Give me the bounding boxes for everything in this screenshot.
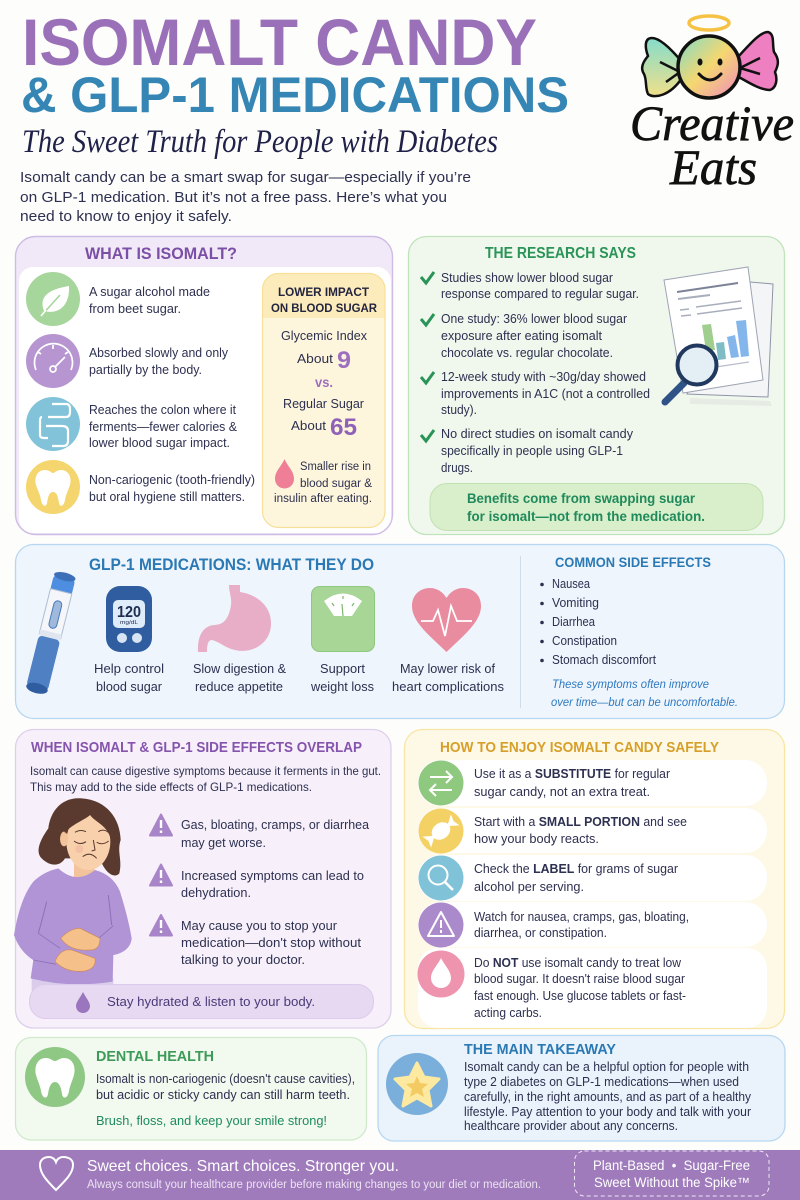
heading: WHAT IS ISOMALT? (85, 244, 237, 263)
note: symptoms improve: These symptoms often improve (552, 677, 709, 691)
box heading: LOWER IMPACT (278, 285, 370, 299)
icon: injection pen (25, 570, 76, 696)
logo wordmark (630, 95, 794, 195)
note: smaller rise: blood sugar & (300, 478, 372, 490)
callout: benefits: for isomalt—not from the medication. (467, 508, 705, 524)
regular sugar value: Regular Sugar (283, 397, 364, 411)
intro text (20, 169, 471, 225)
callout: benefits: Benefits come from swapping sugar (467, 490, 696, 506)
text: non-cariogenic: but oral hygiene still matters. (89, 490, 245, 504)
warning item: gas and bloating: Gas, bloating, cramps, or diarrhea (181, 818, 369, 832)
text: reaches the colon (89, 403, 238, 450)
intro text: Isomalt candy can be a smart swap for sugar—especially if you’re (20, 169, 471, 186)
panel: glp-1 medications (16, 544, 784, 718)
warning item: stopping medication: medication—don't stop without (181, 936, 362, 950)
tip: Brush, floss, and keep your smile strong! (96, 1113, 327, 1128)
subtitle: The Sweet Truth for People with Diabetes (22, 124, 498, 160)
research checklist: 12-week study with ~30g/day showed (441, 370, 646, 384)
icon: heart outline (40, 1157, 73, 1190)
heading: WHEN ISOMALT & GLP-1 SIDE EFFECTS OVERLAP (31, 739, 362, 756)
title: ISOMALT CANDY (22, 5, 537, 79)
logo: Creative Eats (630, 16, 794, 195)
research checklist: chocolate vs. regular chocolate. (441, 346, 613, 360)
warning item: dehydration (150, 864, 364, 900)
body text: but acidic or sticky candy can still harm teeth. (96, 1087, 350, 1102)
tagline: Sweet choices. Smart choices. Stronger you. (87, 1158, 399, 1175)
label: help control blood sugar (94, 661, 164, 694)
side effects list: Constipation (552, 633, 617, 648)
glycemic index value: Glycemic Index (281, 329, 368, 343)
row: small portion: Start with a SMALL PORTION and see (474, 815, 687, 829)
icon: weighing scale (312, 586, 374, 652)
label: slow digestion (193, 661, 286, 694)
row: check the label (418, 855, 767, 901)
warning item: dehydration: Increased symptoms can lead to (181, 869, 364, 883)
icon: candy with halo (642, 16, 778, 98)
logo wordmark: Creative (630, 95, 794, 151)
warning item: stopping medication: May cause you to stop your (181, 919, 337, 933)
icon: tooth (25, 1047, 85, 1107)
note: smaller rise: Smaller rise in (300, 461, 371, 473)
research checklist: response compared to regular sugar. (441, 287, 639, 301)
text: non-cariogenic: Non-cariogenic (tooth-friendly) (89, 473, 255, 487)
side effects list (540, 576, 656, 667)
research checklist: exposure after eating isomalt (441, 329, 603, 343)
panel: how to enjoy safely (404, 730, 784, 1028)
icon: blood drop (275, 459, 294, 489)
heading: common side effects: COMMON SIDE EFFECTS (555, 554, 711, 570)
icon: stomach (198, 585, 271, 652)
warning item: gas and bloating: may get worse. (181, 836, 266, 850)
callout: stay hydrated: Stay hydrated & listen to your body. (107, 994, 315, 1009)
body text (464, 1059, 752, 1133)
row: do not treat low blood sugar: fast enough. Use glucose tablets or fast- (474, 989, 686, 1003)
label: slow digestion: reduce appetite (195, 679, 283, 694)
text: non-cariogenic (89, 473, 255, 504)
glycemic index value: 9 (337, 347, 351, 374)
label: support weight loss: weight loss (310, 679, 374, 694)
label: heart complications (392, 661, 504, 694)
note: symptoms improve (551, 677, 738, 709)
icon: tooth (26, 460, 80, 514)
panel: the research says (408, 236, 784, 534)
row: do not treat low blood sugar (418, 948, 767, 1028)
side effects list: Nausea (552, 576, 591, 591)
side effects list: Diarrhea (552, 614, 596, 629)
icon: glucose meter (106, 586, 152, 652)
intro text (30, 765, 381, 794)
label: help control blood sugar: blood sugar (96, 679, 163, 694)
glycemic index value: About (297, 351, 333, 366)
box heading (271, 285, 377, 315)
icon: gauge (26, 334, 80, 388)
text: reaches the colon: ferments—fewer calories & (89, 420, 238, 434)
icon: glucose meter: 120 (117, 604, 141, 621)
icon: leaf (26, 272, 80, 326)
box heading: ON BLOOD SUGAR (271, 301, 377, 315)
row: check the label: Check the LABEL for grams of sugar (474, 862, 678, 876)
label: heart complications: May lower risk of (400, 661, 495, 676)
callout: benefits (430, 484, 763, 530)
heading: THE MAIN TAKEAWAY (464, 1041, 616, 1058)
row: substitute: Use it as a SUBSTITUTE for regular (474, 767, 670, 781)
icon: star (386, 1053, 448, 1115)
text: sugar alcohol: from beet sugar. (89, 302, 181, 316)
illustration: woman holding stomach (14, 798, 132, 992)
row: small portion: how your body reacts. (474, 832, 599, 846)
research checklist (421, 271, 650, 475)
regular sugar value: About (291, 418, 326, 433)
row: substitute (418, 760, 767, 806)
regular sugar value: 65 (330, 414, 357, 441)
panel: what is isomalt (16, 236, 392, 534)
badge: plant-based sugar-free: Plant-Based • Sugar-Free (593, 1158, 750, 1173)
intro text: need to know to enjoy it safely. (20, 208, 232, 225)
research checklist: specifically in people using GLP-1 (441, 444, 623, 458)
row: substitute: sugar candy, not an extra treat. (474, 785, 650, 799)
callout: stay hydrated (30, 984, 374, 1018)
label: help control blood sugar: Help control (94, 661, 164, 676)
heading: HOW TO ENJOY ISOMALT CANDY SAFELY (440, 739, 719, 756)
icon: glucose meter: mg/dL (120, 620, 138, 626)
row: watch for symptoms (418, 902, 767, 948)
row: do not treat low blood sugar: acting carbs. (474, 1006, 542, 1020)
icons: check marks (421, 272, 434, 441)
disclaimer: Always consult your healthcare provider before making changes to your diet or medication. (87, 1179, 541, 1191)
row: do not treat low blood sugar: blood sugar. It doesn't raise blood sugar (474, 972, 685, 986)
intro text: on GLP-1 medication. But it’s not a free pass. Here’s what you (20, 189, 447, 206)
side effects list: Vomiting (552, 595, 599, 610)
heading: GLP-1 MEDICATIONS: WHAT THEY DO (89, 555, 374, 574)
label: slow digestion: Slow digestion & (193, 661, 286, 676)
warning item: gas and bloating (150, 814, 369, 850)
heading: DENTAL HEALTH (96, 1048, 214, 1065)
text: sugar alcohol: A sugar alcohol made (89, 285, 210, 299)
regular sugar value (283, 397, 364, 441)
body text: Isomalt is non-cariogenic (doesn't cause cavities), (96, 1071, 355, 1086)
research checklist: study). (441, 403, 477, 417)
body text: lifestyle. Pay attention to your body and talk with your (464, 1104, 752, 1119)
intro text: This may add to the side effects of GLP-1 medications. (30, 781, 312, 794)
row: watch for symptoms: Watch for nausea, cramps, gas, bloating, (474, 910, 689, 924)
row: small portion (418, 808, 767, 854)
heading: THE RESEARCH SAYS (485, 245, 636, 262)
warning item: stopping medication: talking to your doctor. (181, 953, 305, 967)
note: smaller rise: insulin after eating. (274, 493, 372, 505)
body text: carefully, in the right amounts, and as part of a healthy (464, 1089, 752, 1104)
glycemic index value (281, 329, 368, 374)
research checklist: One study: 36% lower blood sugar (441, 312, 627, 326)
research checklist: improvements in A1C (not a controlled (441, 387, 650, 401)
body text: healthcare provider about any concerns. (464, 1118, 678, 1133)
title (21, 5, 569, 123)
research checklist: Studies show lower blood sugar (441, 271, 613, 285)
panel: lower impact on blood sugar (262, 274, 385, 528)
intro text: Isomalt can cause digestive symptoms because it ferments in the gut. (30, 765, 381, 778)
research checklist: drugs. (441, 461, 473, 475)
text: absorbed slowly: partially by the body. (89, 363, 202, 377)
text: absorbed slowly: Absorbed slowly and only (89, 346, 229, 360)
text: absorbed slowly (89, 346, 229, 377)
label: support weight loss (310, 661, 374, 694)
footer banner (0, 1150, 800, 1200)
badge: plant-based sugar-free: Sweet Without the Spike™ (594, 1175, 750, 1190)
panel: side effects overlap (14, 730, 391, 1028)
icon: intestine (26, 397, 80, 451)
logo wordmark: Eats (669, 139, 757, 195)
row: check the label: alcohol per serving. (474, 880, 584, 894)
body text: Isomalt candy can be a helpful option for people with (464, 1059, 749, 1074)
icon: heart with pulse (412, 588, 481, 652)
warning item: stopping medication (150, 915, 362, 967)
label: heart complications: heart complications (392, 679, 504, 694)
panel: the main takeaway (378, 1036, 785, 1141)
body text (96, 1071, 355, 1102)
text: sugar alcohol (89, 285, 210, 316)
label: support weight loss: Support (320, 661, 365, 676)
research checklist: No direct studies on isomalt candy (441, 427, 634, 441)
note: symptoms improve: over time—but can be uncomfortable. (551, 695, 738, 709)
body text: type 2 diabetes on GLP-1 medications—when used (464, 1074, 739, 1089)
title: & GLP-1 MEDICATIONS (21, 67, 569, 123)
side effects list: Stomach discomfort (552, 652, 656, 667)
vs label: vs. (315, 374, 333, 390)
warning item: dehydration: dehydration. (181, 886, 251, 900)
text: reaches the colon: lower blood sugar impact. (89, 436, 230, 450)
panel: dental health (16, 1038, 366, 1140)
badge: plant-based sugar-free (574, 1151, 769, 1196)
note: smaller rise (274, 461, 372, 505)
icon: report with magnifying glass (664, 267, 773, 406)
row: do not treat low blood sugar: Do NOT use isomalt candy to treat low (474, 956, 682, 970)
text: reaches the colon: Reaches the colon where it (89, 403, 237, 417)
row: watch for symptoms: diarrhea, or constipation. (474, 926, 607, 940)
